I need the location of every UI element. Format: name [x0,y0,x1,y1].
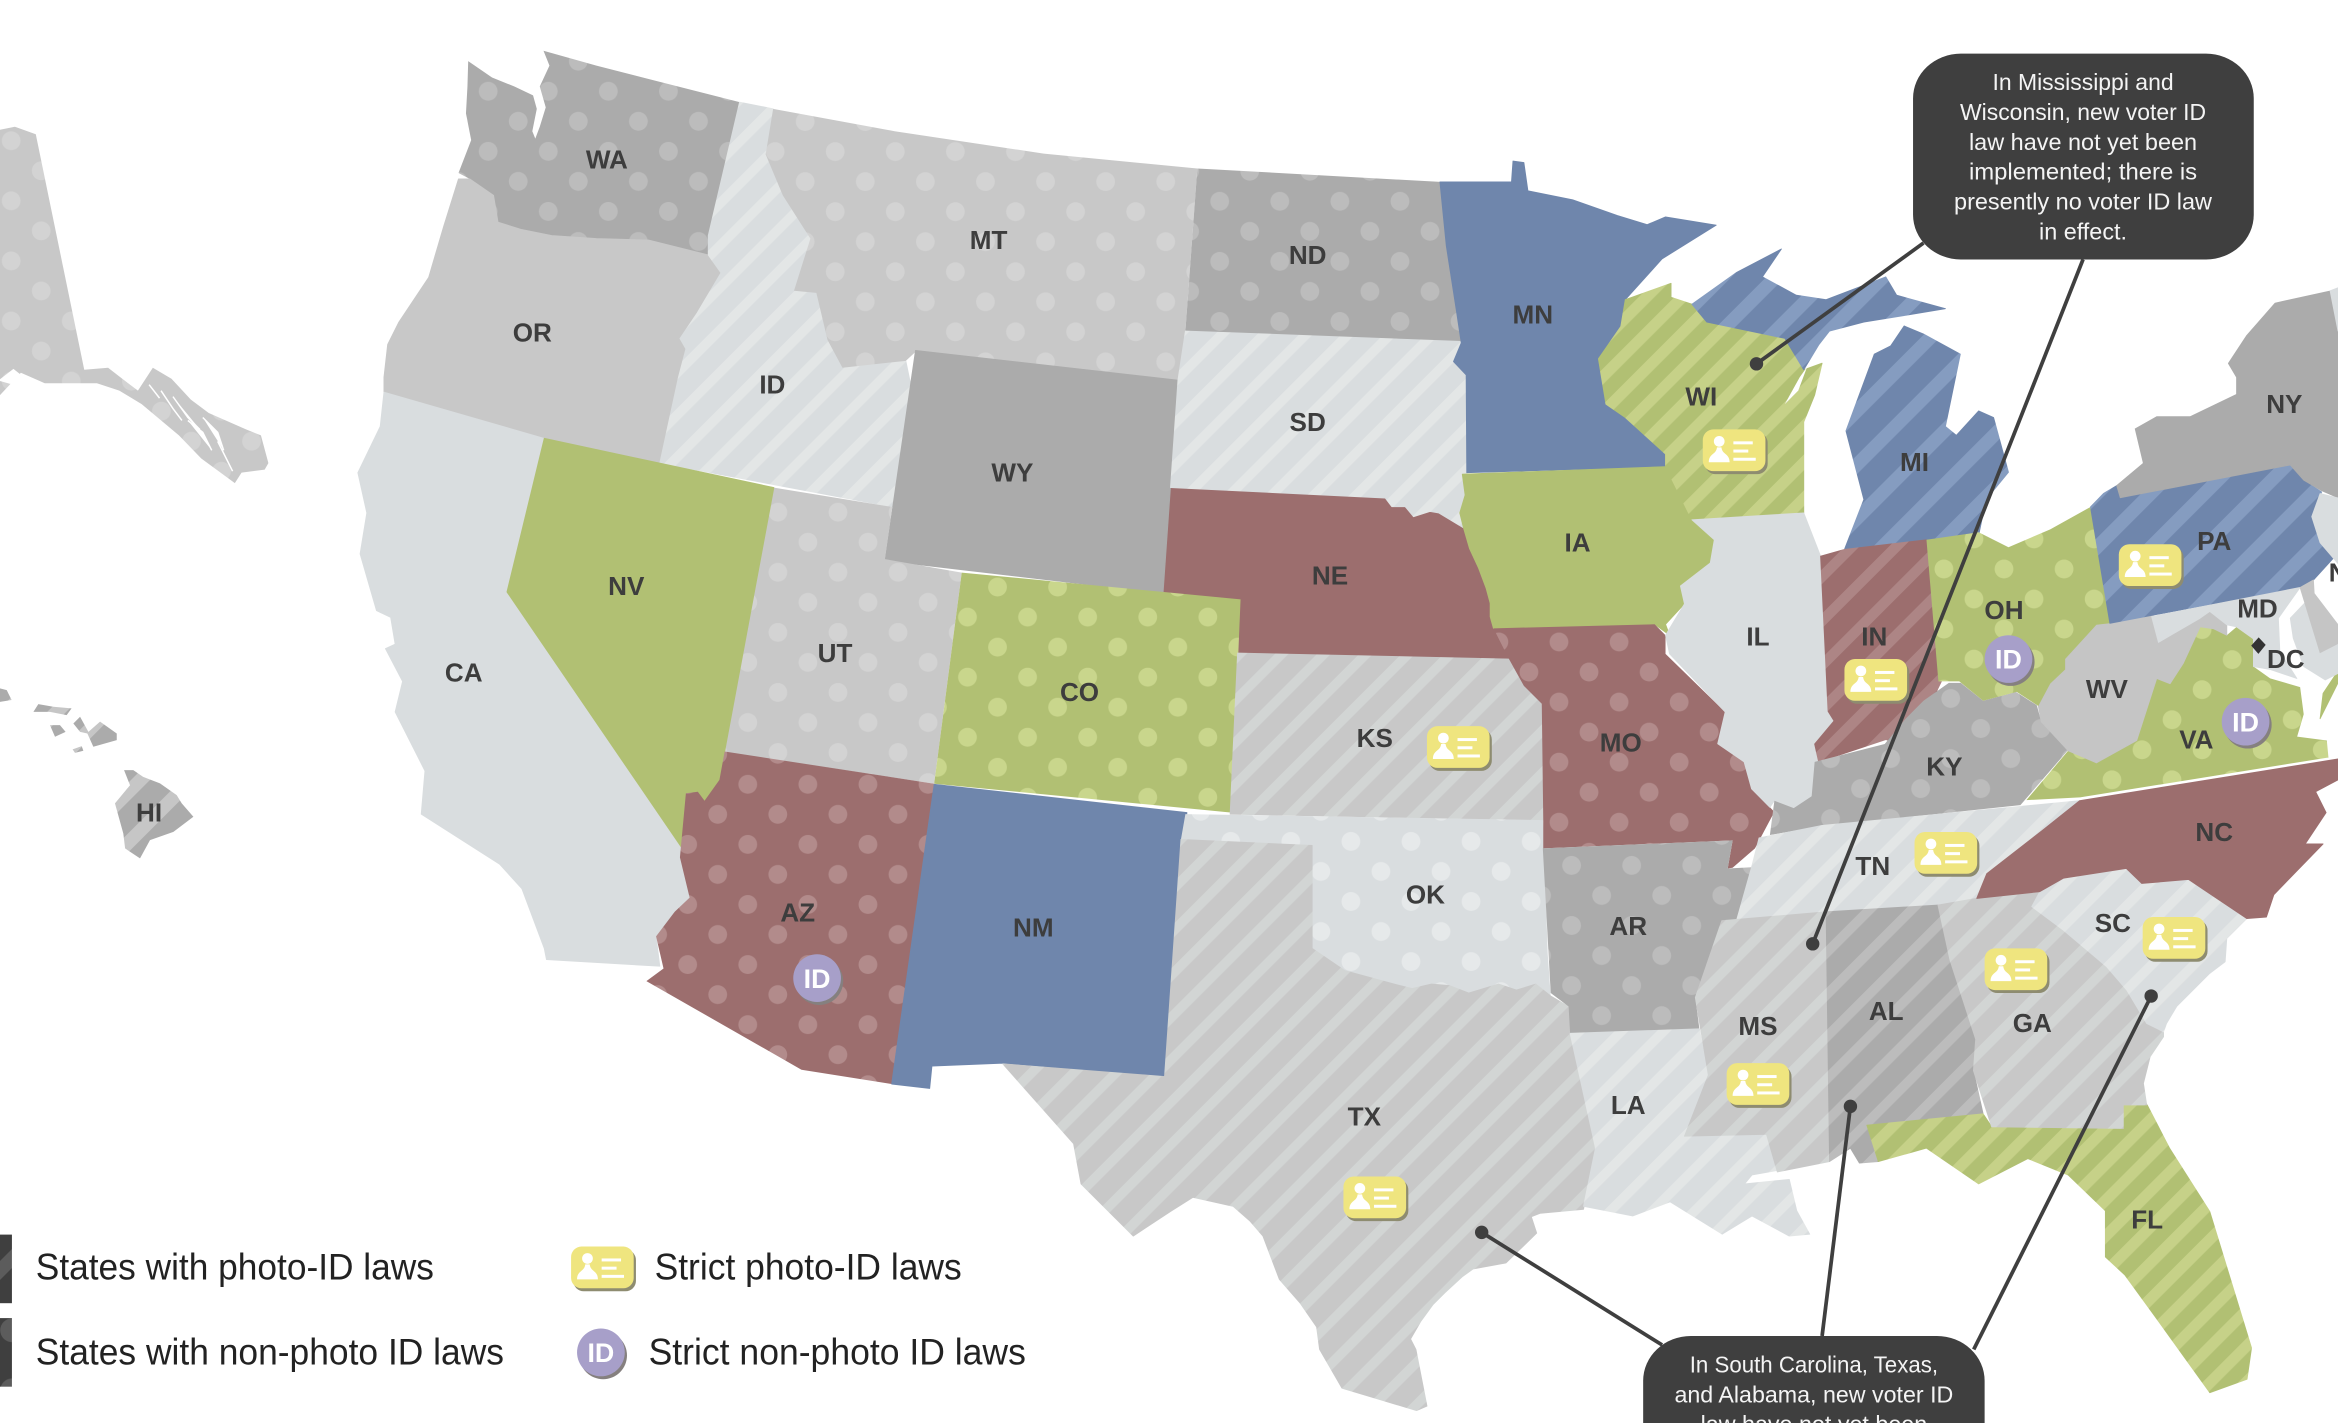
state: Pennsylvania [2090,465,2337,623]
state: Nevada [507,438,774,848]
state: Utah [725,488,962,784]
state: Kentucky [1770,683,2068,835]
state: Utah: UT [818,638,852,668]
icon: strict non-photo ID, Virginia: ID [2232,707,2259,737]
state: New York: NY [2266,389,2302,419]
state: Ohio [1926,507,2110,706]
callout: Mississippi and Wisconsin: law have not yet been [1969,129,2197,155]
icon: strict photo ID, South Carolina [2143,917,2208,962]
state: Mississippi [1684,912,1830,1172]
state: Pennsylvania: PA [2197,526,2232,556]
legend: states with non-photo ID laws: States with non-photo ID laws [36,1330,504,1372]
state: Nebraska: NE [1312,560,1348,590]
state: District of Columbia: DC [2267,644,2305,674]
state: Illinois [1666,513,1834,808]
state: Nebraska [1163,488,1509,659]
leader lines: South Carolina, Texas, Alabama [1475,989,2158,1349]
icon: strict photo ID, Pennsylvania [2119,544,2184,589]
state: Tennessee: TN [1855,851,1890,881]
state: New Mexico [892,784,1187,1088]
icon: strict non-photo ID, Arizona: ID [804,964,831,994]
state: Louisiana [1570,1029,1810,1236]
state: Indiana: IN [1861,622,1887,652]
callout: Mississippi and Wisconsin: implemented; there is [1969,159,2197,185]
state: Virginia: VA [2179,725,2214,755]
state: Delaware [2300,580,2338,653]
icon: strict photo ID, Indiana [1844,659,1909,704]
icon: strict non-photo ID, Virginia [2222,698,2272,749]
leader lines: Mississippi and Wisconsin [1750,243,2083,951]
state: South Carolina: SC [2095,908,2131,938]
state: North Dakota [1185,168,1461,341]
callout: Mississippi and Wisconsin: Wisconsin, new voter ID [1960,99,2206,125]
state: Ohio: OH [1984,595,2024,625]
state: Colorado [934,573,1241,813]
callout: Mississippi and Wisconsin [1913,54,2254,259]
state: Michigan: MI [1900,447,1929,477]
icon: strict photo ID, Texas [1343,1176,1408,1221]
state: Illinois: IL [1746,622,1770,652]
state: Missouri: MO [1600,727,1642,757]
legend: strict photo-ID laws: Strict photo-ID laws [655,1245,962,1287]
state: Georgia [1938,892,2164,1128]
state: Arizona [646,751,934,1084]
state: South Carolina [2032,868,2247,1032]
icon: strict photo ID, Wisconsin [1703,429,1768,474]
state: Georgia: GA [2013,1008,2052,1038]
state: Florida [1867,1105,2252,1393]
state: West Virginia: WV [2086,674,2128,704]
callout: Mississippi and Wisconsin: in effect. [2039,218,2127,244]
state: Mississippi: MS [1738,1011,1778,1041]
state: Oregon: OR [513,317,552,347]
state: Wisconsin: WI [1685,382,1717,412]
state: Florida: FL [2131,1205,2163,1235]
state: South Dakota: SD [1290,407,1326,437]
legend: states with photo-ID laws: States with photo-ID laws [36,1245,434,1287]
state: Kansas: KS [1357,723,1393,753]
state: Minnesota: MN [1513,300,1553,330]
state: New York [2117,291,2338,498]
state: Wyoming: WY [991,458,1033,488]
icon: strict photo ID, Kansas [1427,726,1492,771]
callout: South Carolina, Texas, Alabama [1643,1336,1985,1423]
state: Hawaii: HI [136,798,162,828]
state: Iowa: IA [1565,528,1591,558]
state: Montana: MT [970,225,1007,255]
legend: strict non-photo ID laws: ID [587,1338,614,1368]
state: Oklahoma [1181,814,1551,996]
callout: South Carolina, Texas, Alabama: and Alabama, new voter ID [1674,1381,1953,1407]
state: California: CA [445,657,483,687]
state: Texas: TX [1348,1102,1382,1132]
state: Alabama [1826,905,1983,1163]
state: Washington: WA [586,144,628,174]
icon: strict photo ID, Mississippi [1727,1063,1792,1108]
state: New England [2330,288,2338,331]
state: Colorado: CO [1060,677,1099,707]
state: California [358,392,690,966]
state: Montana [766,109,1197,382]
state: Iowa [1460,467,1714,635]
state: North Carolina: NC [2195,817,2233,847]
state: District of Columbia [2251,637,2305,674]
state: Maryland: MD [2237,593,2278,623]
state: Kentucky: KY [1926,751,1962,781]
state: Arkansas [1543,840,1752,1033]
state: Wyoming [885,350,1178,593]
state: Louisiana: LA [1611,1090,1646,1120]
callout: South Carolina, Texas, Alabama: In South Carolina, Texas, [1690,1352,1938,1378]
legend: strict non-photo ID laws: Strict non-photo ID laws [649,1330,1026,1372]
state: New Mexico: NM [1013,912,1054,942]
state: Alaska [0,127,268,483]
state: North Carolina [1977,759,2338,918]
icon: strict photo ID, Georgia [1985,948,2049,993]
state: New Jersey [2312,494,2338,588]
state: Virginia [2026,627,2338,800]
state: Texas [1003,839,1595,1411]
state: Wisconsin [1598,283,1822,520]
state: Tennessee [1737,801,2080,920]
state: West Virginia [2038,590,2227,763]
state: Oklahoma: OK [1406,880,1445,910]
state: Indiana [1815,540,1941,762]
legend: states with non-photo ID laws [0,1318,504,1387]
state: Michigan [1692,249,2008,549]
state: Washington [459,51,740,255]
icon: strict non-photo ID, Ohio [1985,635,2035,686]
state: Missouri [1493,624,1774,869]
state: Maryland [2152,587,2338,680]
state: Arkansas: AR [1609,911,1647,941]
state: Arizona: AZ [780,897,815,927]
icon: strict non-photo ID, Arizona [793,954,843,1005]
legend: strict photo-ID laws [571,1245,962,1291]
state: Minnesota [1440,161,1716,473]
icon: strict photo ID, Tennessee [1915,832,1979,877]
callout: Mississippi and Wisconsin: In Mississippi and [1992,69,2174,95]
state: Hawaii [0,688,193,858]
state: Idaho: ID [759,370,785,400]
state: North Dakota: ND [1289,240,1327,270]
state: Idaho [660,102,911,507]
state: South Dakota [1170,331,1467,528]
state: Alabama: AL [1869,996,1904,1026]
icon: strict non-photo ID, Ohio: ID [1995,645,2022,675]
legend: strict non-photo ID laws [577,1329,1026,1379]
callout: Mississippi and Wisconsin: presently no voter ID law [1954,188,2212,214]
state: Nevada: NV [608,571,645,601]
legend: states with photo-ID laws [0,1235,434,1303]
state: Kansas [1230,653,1543,820]
state: Oregon [384,179,721,463]
